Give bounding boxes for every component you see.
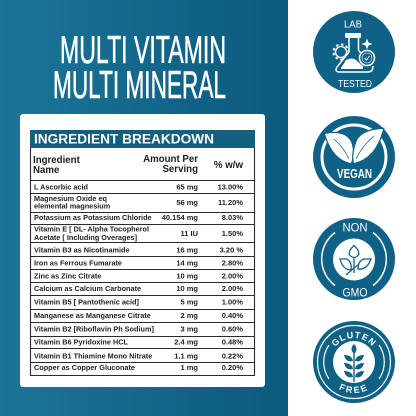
table rows: 0.40% (222, 311, 243, 320)
table rows: 1 mg (180, 363, 198, 372)
table rows: 2.00% (222, 271, 243, 280)
table rows: 40.154 mg (162, 213, 198, 222)
table rows: 5 mg (180, 297, 198, 306)
title (53, 29, 226, 107)
table rows: Vitamin E [ DL- Alpha Tocopherol (34, 224, 149, 234)
icon: non gmo badge: GMO (342, 288, 368, 300)
table rows: 11 IU (180, 229, 198, 238)
table rows: 2.00% (222, 284, 243, 293)
table rows: 16 mg (176, 245, 198, 254)
column headers: Name (33, 165, 60, 176)
table rows: 10 mg (176, 271, 198, 280)
column headers: Amount Per (143, 154, 198, 165)
column headers: % w/w (214, 160, 243, 171)
table rows: Iron as Ferrous Fumarate (34, 259, 122, 268)
table rows: Manganese as Manganese Citrate (34, 311, 151, 320)
table rows: 8.03% (222, 213, 243, 222)
table heading (30, 130, 255, 148)
table rows: 0.48% (222, 338, 243, 346)
panel: blue background (0, 0, 288, 416)
table rows: elemental magnesium (34, 202, 111, 211)
table rows: 0.20% (222, 363, 243, 372)
column headers: Serving (162, 164, 198, 175)
icon: vegan badge (313, 116, 395, 198)
table rows: L Ascorbic acid (34, 182, 88, 192)
table rows (34, 182, 243, 372)
table rows: 3.20 % (220, 245, 243, 254)
icon: lab tested badge: LAB (344, 20, 362, 30)
table rows: 65 mg (176, 182, 198, 192)
table rows: 0.22% (222, 351, 243, 360)
panel: ingredient table card (20, 114, 265, 387)
icon: gluten free badge: FREE (339, 384, 368, 394)
table rows: 0.60% (222, 324, 243, 333)
table rows: 10 mg (176, 284, 198, 293)
table rows: Vitamin B2 [Riboflavin Ph Sodium] (34, 324, 154, 333)
table rows: 2 mg (180, 311, 198, 320)
table rows: Acetate [ Including Overages] (34, 233, 138, 242)
title: MULTI MINERAL (53, 64, 226, 107)
icon: non gmo badge: NON (342, 220, 368, 234)
table rows: 56 mg (176, 198, 198, 207)
table rows: Vitamin B6 Pyridoxine HCL (34, 338, 128, 346)
table rows: 11.20% (218, 198, 243, 207)
icon: lab tested badge: TESTED (338, 79, 372, 90)
table rows: Vitamin B1 Thiamine Mono Nitrate (34, 351, 152, 360)
table rows: 3 mg (180, 324, 198, 333)
table rows: 14 mg (176, 259, 198, 268)
column headers: Ingredient (33, 155, 81, 166)
icon: gluten free badge: GLUTEN (332, 332, 376, 346)
icon: vegan badge: VEGAN (337, 167, 372, 181)
icon: lab tested badge (313, 11, 395, 93)
table rows: 1.1 mg (174, 351, 198, 360)
table grid (30, 148, 255, 376)
title: MULTI VITAMIN (60, 29, 226, 72)
table rows: 1.00% (222, 297, 243, 306)
table rows: Potassium as Potassium Chloride (34, 213, 152, 222)
table rows: Zinc as Zinc Citrate (34, 271, 101, 280)
table rows: Vitamin B5 [ Pantothenic acid] (34, 297, 139, 306)
table rows: 2.4 mg (174, 338, 198, 346)
table rows: Copper as Copper Gluconate (34, 363, 135, 372)
table rows: Vitamin B3 as Nicotinamide (34, 245, 130, 254)
table heading: INGREDIENT BREAKDOWN (34, 132, 214, 146)
table rows: Magnesium Oxide eq (34, 194, 107, 203)
icon: gluten free badge (313, 321, 395, 403)
icon: non gmo badge (313, 218, 395, 300)
table rows: Calcium as Calcium Carbonate (34, 284, 141, 293)
table rows: 13.00% (218, 182, 243, 192)
table rows: 2.80% (222, 259, 243, 268)
table rows: 1.50% (222, 229, 243, 238)
column headers (33, 154, 243, 176)
